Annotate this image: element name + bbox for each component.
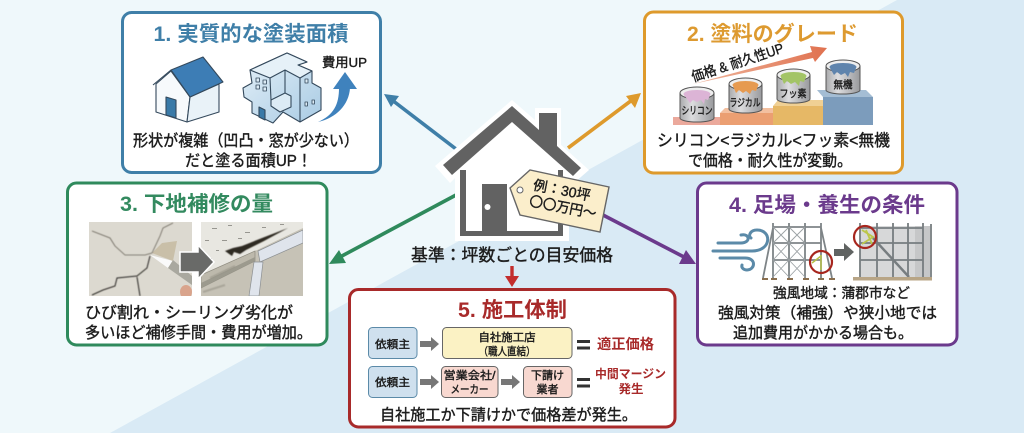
text: panel 1 description [133, 132, 359, 170]
caption: base price: 基準：坪数ごとの目安価格 [411, 246, 613, 265]
text: panel 1 description: だと塗る面積UP！ [185, 152, 312, 170]
box: in-house contractor: （職人直結） [478, 345, 536, 358]
icon: complex building [243, 53, 321, 123]
label: price and durability up: 価格 & 耐久性UP [689, 40, 786, 85]
text: panel 3 description: 多いほど補修手間・費用が増加。 [85, 324, 312, 342]
text: panel 3 description [85, 304, 312, 342]
heading: panel 3: 3. 下地補修の量 [120, 193, 273, 216]
icon: simple house [153, 57, 223, 122]
text: panel 2 description: で価格・耐久性が変動。 [688, 152, 852, 170]
text: panel 1 description: 形状が複雑（凹凸・窓が少ない） [133, 132, 359, 150]
arrow: to panel 5 [505, 266, 519, 287]
panel: 4 scaffold conditions [698, 183, 957, 345]
panel: 2 paint grade [644, 12, 902, 173]
box: client [368, 366, 417, 398]
icon: scaffold [762, 223, 835, 279]
photo: failed sealing joint [201, 222, 303, 296]
panel: 3 substrate repair [68, 183, 327, 345]
box: sales company: メーカー [450, 383, 488, 396]
label: middle margin: 発生 [618, 381, 644, 396]
heading: panel 4: 4. 足場・養生の条件 [729, 194, 925, 217]
icon: fluorine can: フッ素 [780, 87, 806, 100]
text: panel 4 description [718, 285, 937, 342]
icon: silicon can: シリコン [682, 105, 712, 117]
icon: radical can [729, 78, 762, 113]
heading: panel 1: 1. 実質的な塗装面積 [154, 23, 348, 46]
box: in-house contractor [442, 328, 572, 358]
icon: radical can: ラジカル [730, 97, 760, 109]
icon: equals [577, 378, 590, 388]
icon: fluorine can [777, 69, 810, 103]
price tag: 例：30坪 [532, 177, 592, 203]
arrow: to panel 2 [568, 93, 641, 148]
price tag: 〇〇万円〜 [528, 193, 598, 221]
icon: cost up arrow [318, 72, 357, 122]
flow: subcontracted [368, 366, 666, 398]
box: client [368, 328, 417, 358]
box: subcontractor [524, 366, 572, 398]
icon: reinforcement highlight [810, 251, 832, 273]
arrow: to panel 1 [384, 94, 456, 149]
heading: panel 2: 2. 塗料のグレード [687, 22, 858, 46]
flow: direct contractor [368, 328, 654, 358]
arrow: before to after [180, 245, 214, 279]
box: in-house contractor: 自社施工店 [478, 330, 536, 344]
icon: inorganic can: 無機 [834, 78, 853, 91]
arrow: scaffold change [834, 243, 854, 261]
arrow: to panel 3 [329, 195, 456, 264]
label: middle margin [595, 366, 666, 396]
box: client: 依頼主 [375, 376, 410, 389]
price tag [510, 170, 609, 232]
panel: 5 construction system [350, 290, 675, 427]
text: panel 4 description: 追加費用がかかる場合も。 [733, 324, 913, 342]
text: panel 3 description: ひび割れ・シーリング劣化が [85, 304, 293, 322]
icon: covered scaffold [853, 223, 932, 280]
box: subcontractor: 業者 [536, 383, 558, 396]
arrow: client to sales company [420, 375, 439, 389]
text: panel 4 description: 強風対策（補強）や狭小地では [718, 304, 937, 322]
photo: cracked wall [89, 222, 192, 299]
label: cost up: 費用UP [322, 55, 367, 70]
box: sales company [442, 366, 498, 398]
arrow: price and durability up [693, 46, 827, 84]
icon: wind [713, 230, 768, 270]
arrow: sales to subcontractor [501, 375, 520, 389]
icon: silicon can [680, 87, 714, 122]
text: panel 2 description [657, 131, 890, 170]
label: fair price: 適正価格 [597, 336, 654, 352]
text: panel 2 description: シリコン<ラジカル<フッ素<無機 [657, 131, 890, 150]
box: sales company: 営業会社/ [444, 368, 497, 382]
label: middle margin: 中間マージン [595, 366, 666, 381]
box: client: 依頼主 [375, 338, 410, 351]
heading: panel 5: 5. 施工体制 [458, 299, 567, 322]
arrow: client to contractor [420, 337, 439, 351]
box: subcontractor: 下請け [531, 368, 564, 382]
text: panel 5 description: 自社施工か下請けかで価格差が発生。 [380, 406, 637, 424]
icon: inorganic can [826, 60, 860, 94]
chart: rising steps [673, 90, 873, 125]
icon: equals [577, 340, 590, 350]
icon: central house [435, 100, 589, 241]
text: panel 4 description: 強風地域：蒲郡市など [773, 285, 910, 301]
panel: 1 effective painted area [122, 12, 380, 172]
arrow: to panel 4 [603, 215, 696, 264]
